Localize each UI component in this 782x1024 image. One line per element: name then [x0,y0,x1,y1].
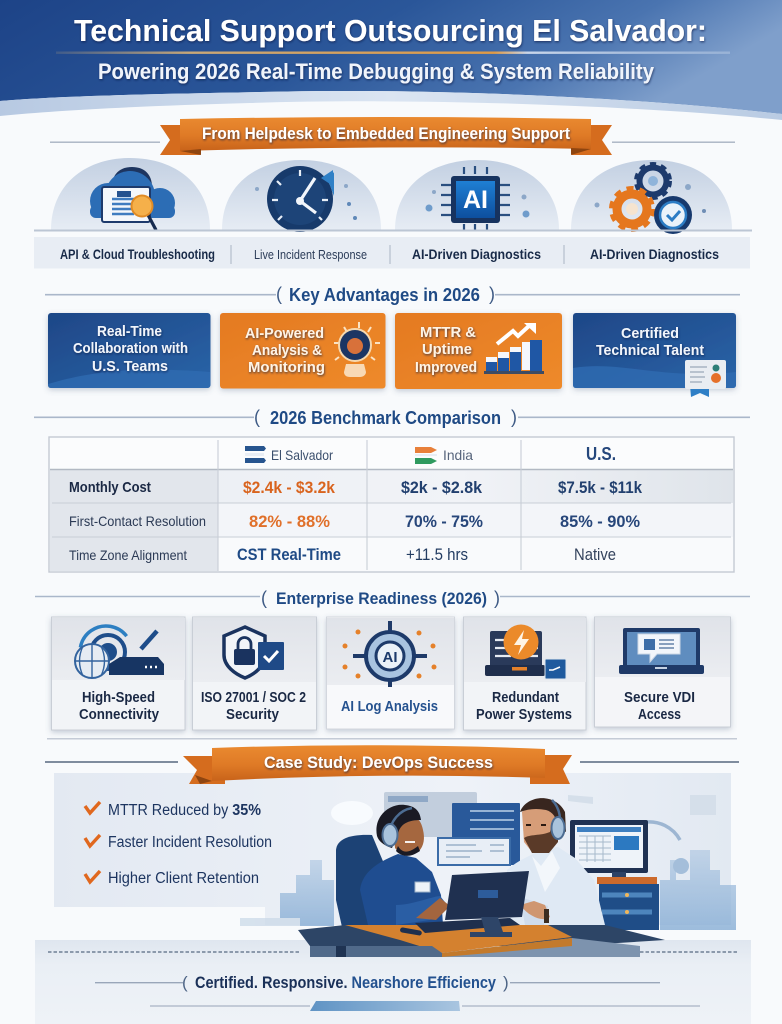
heading: benchmark comparison: 2026 Benchmark Comparison [270,408,501,428]
card: real-time collaboration: Real-Time [97,323,162,340]
table header row: El Salvador [271,447,333,463]
card: redundant power: Redundant [492,690,559,706]
subtitle: Powering 2026 Real-Time Debugging & System Reliability [98,59,655,84]
checklist results: Faster Incident Resolution [108,834,272,851]
row: time zone alignment: CST Real-Time [237,545,341,564]
card: ISO security: Security [226,707,279,723]
checklist results [85,802,272,887]
heading: key advantages: ( [276,284,282,304]
row: first-contact resolution: 70% - 75% [405,512,483,531]
ribbon: from helpdesk [50,117,735,155]
card: real-time collaboration: Collaboration with [73,340,188,357]
card: real-time collaboration [48,313,210,388]
panel: readiness cards [52,617,730,730]
card: redundant power [464,617,586,730]
dome: gears [571,160,732,234]
checklist results: MTTR Reduced by 35% [108,802,261,819]
card: certified talent: Technical Talent [596,342,704,359]
card: AI-powered analysis: Analysis & [252,342,322,359]
table header row: India [443,447,473,463]
card: real-time collaboration: U.S. Teams [92,358,168,375]
capability label strip: API & Cloud Troubleshooting [60,247,215,262]
card: high-speed connectivity: Connectivity [79,707,159,723]
right monitor [570,820,648,878]
gauge [615,822,680,850]
card: certified talent: Certified [621,325,679,342]
panel: footer [35,940,751,1024]
heading: key advantages: Key Advantages in 2026 [289,285,480,305]
ribbon: from helpdesk: From Helpdesk to Embedded Engineering Support [202,125,570,143]
capability label strip: AI-Driven Diagnostics [412,246,541,262]
table header row [245,444,616,464]
card: high-speed connectivity: High-Speed [82,690,155,706]
case study ribbon [45,745,739,784]
row: time zone alignment: Native [574,545,616,564]
heading: key advantages: ) [489,284,495,304]
card: AI log analysis: AI [382,649,398,666]
illustration: support engineers [240,792,736,957]
title: Technical Support Outsourcing El Salvador: [74,14,707,48]
capability label strip [34,237,750,268]
card: AI-powered analysis: AI-Powered [245,325,324,342]
row: first-contact resolution [69,512,640,531]
card: AI log analysis [326,617,454,729]
title divider [56,52,730,54]
row: first-contact resolution: 82% - 88% [249,512,330,531]
row: time zone alignment [69,545,616,564]
card: AI log analysis: AI Log Analysis [341,698,438,715]
footer tagline: Certified. Responsive. Nearshore Efficiency [195,974,497,992]
heading: enterprise readiness: Enterprise Readiness (2026) [276,589,487,608]
card: MTTR and uptime: Improved [415,359,477,376]
card: high-speed connectivity [52,617,185,730]
desk [298,918,665,957]
row: time zone alignment: +11.5 hrs [406,545,468,564]
header banner [0,0,782,120]
back wall screens [384,792,716,865]
heading: benchmark comparison: ( [254,407,260,427]
heading: key advantages [45,284,740,305]
heading: benchmark comparison: ) [511,407,517,427]
row: first-contact resolution: First-Contact Resolution [69,513,206,529]
dome: live incident clock [222,160,381,232]
panel: case study [45,745,739,957]
card: secure VDI [594,617,730,727]
card: secure VDI: Secure VDI [624,690,695,706]
panel: advantage cards [48,313,736,397]
row: monthly cost [69,478,642,497]
heading: benchmark comparison [34,407,750,428]
panel: capability domes [34,158,752,268]
card: MTTR and uptime [395,313,562,389]
card: AI-powered analysis: Monitoring [248,359,325,376]
card: ISO security: ISO 27001 / SOC 2 [201,690,306,706]
checklist results: Higher Client Retention [108,870,259,887]
heading: enterprise readiness: ) [494,588,500,608]
card: secure VDI: Access [638,707,681,723]
row: monthly cost: Monthly Cost [69,479,151,496]
dome: AI chip [395,160,559,231]
card: AI-powered analysis [220,313,386,388]
right engineer [505,798,605,925]
benchmark table [49,437,734,572]
card: ISO security [192,617,316,730]
card: MTTR and uptime: MTTR & [420,324,476,341]
left engineer [360,805,450,925]
table header row: U.S. [586,444,616,464]
row: monthly cost: $2k - $2.8k [401,478,483,497]
dome: AI chip: AI [463,186,488,214]
card: certified talent [573,313,736,397]
row: monthly cost: $7.5k - $11k [558,478,642,497]
card: MTTR and uptime: Uptime [422,341,472,358]
panel: footer: ) [503,973,509,992]
heading: enterprise readiness: ( [261,588,267,608]
row: time zone alignment: Time Zone Alignment [69,547,187,563]
capability label strip: AI-Driven Diagnostics [590,246,719,262]
center monitor [445,871,529,937]
capability label strip: Live Incident Response [254,247,367,262]
card: redundant power: Power Systems [476,707,572,723]
row: first-contact resolution: 85% - 90% [560,512,640,531]
footer accent bar [310,1001,460,1011]
server rack [597,877,659,930]
dome: API and cloud [51,158,210,230]
case study ribbon: Case Study: DevOps Success [264,753,493,772]
chair [336,835,385,927]
panel: footer: ( [182,973,188,992]
cloud [331,801,373,825]
heading: enterprise readiness [35,588,750,608]
skyline [240,850,736,930]
row: monthly cost: $2.4k - $3.2k [243,478,335,497]
